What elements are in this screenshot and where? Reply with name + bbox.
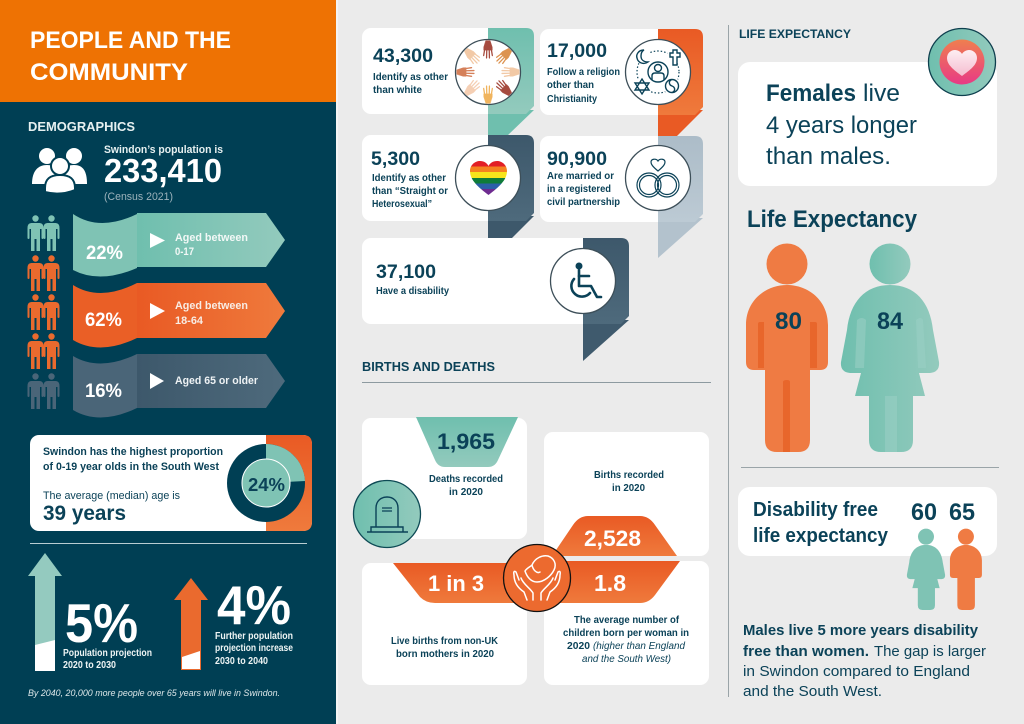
card: married or civil partnership: 90,900: [547, 149, 607, 170]
card: married or civil partnership: Are married or: [547, 171, 614, 182]
age band: 65 or older: 16%: [85, 381, 122, 402]
card: live births from non-UK mothers: born mothers in 2020: [396, 649, 494, 660]
callout: median age: 39 years: [43, 502, 126, 525]
tail: married: [658, 218, 703, 258]
callout: median age: Swindon has the highest proportion: [43, 446, 223, 458]
card: religion: 17,000: [547, 41, 607, 62]
card: disability: Have a disability: [376, 286, 449, 297]
age band: 65 or older: Aged 65 or older: [175, 375, 259, 387]
card: identify as other than white: [362, 28, 534, 114]
card: females live longer: than males.: [766, 143, 891, 170]
text: disability free explanation: [743, 623, 986, 700]
card: deaths: Deaths recorded: [429, 474, 503, 485]
figure: male 80: 80: [775, 308, 802, 335]
card: religion: other than: [547, 80, 594, 91]
tail: white other: [488, 110, 534, 136]
card: children per woman: [544, 561, 709, 685]
population figure: [104, 144, 223, 203]
callout: median age: of 0-19 year olds in the South West: [43, 461, 219, 473]
text: disability free explanation: free than women.: [743, 644, 869, 660]
heading: life expectancy chart: Life Expectancy: [747, 206, 918, 233]
card: disability free life expectancy: life expectancy: [753, 525, 889, 547]
figure: male 80: [746, 244, 828, 452]
heading: births and deaths: BIRTHS AND DEATHS: [362, 360, 495, 374]
card: religion: Follow a religion: [547, 67, 620, 78]
card: deaths: in 2020: [449, 487, 483, 498]
card: females live longer: live: [863, 80, 900, 107]
note: 2040 projection: By 2040, 20,000 more people over 65 years will live in Swindon.: [28, 688, 280, 699]
title banner: PEOPLE AND THE: [30, 27, 231, 54]
donut chart: 24%: [227, 444, 305, 522]
card: sexual orientation: Heterosexual”: [372, 199, 432, 210]
figure: small female 60: [907, 529, 945, 610]
age band: 0-17: [73, 213, 285, 277]
callout: median age: The average (median) age is: [43, 490, 180, 502]
card: identify as other than white: 43,300: [373, 46, 433, 67]
title banner: [0, 0, 336, 102]
stat: 4%: 4%: [217, 574, 291, 636]
icon: headstone: [354, 480, 420, 548]
card: live births from non-UK mothers: Live births from non-UK: [391, 636, 499, 647]
stat: 4%: [215, 574, 293, 667]
panel: left demographics sidebar: [0, 0, 336, 724]
age band: 0-17: 22%: [86, 243, 123, 264]
card: disability free life expectancy: Disability free: [753, 499, 878, 521]
card: religion: [540, 29, 703, 115]
age band: 18-64: 18-64: [175, 315, 204, 327]
icon: circle of hands: [456, 40, 520, 104]
card: births: [544, 432, 709, 556]
icon: heart badge: [928, 28, 996, 96]
card: identify as other than white: than white: [373, 85, 422, 96]
age band: 0-17: Aged between: [175, 232, 248, 244]
card: disability free life expectancy: 60: [911, 499, 937, 526]
donut chart: 24%: 24%: [248, 475, 285, 495]
card: children per woman: (higher than England: [593, 641, 685, 652]
tail: religion: [658, 110, 703, 136]
callout: median age: [30, 435, 312, 531]
stat: 5%: Population projection: [63, 648, 152, 659]
arrow: 5% projection: [28, 553, 62, 671]
banner: 2,528: 2,528: [584, 526, 641, 551]
card: births: in 2020: [612, 483, 645, 494]
card: disability free life expectancy: [738, 487, 997, 556]
figure: small male 65: [950, 529, 982, 610]
panel divider: [728, 25, 729, 697]
age band: 65 or older: [73, 354, 285, 418]
tail: disability: [583, 320, 629, 361]
icon: wedding rings: [626, 146, 690, 210]
icon: rainbow heart: [456, 146, 520, 210]
card: females live longer: 4 years longer: [766, 112, 917, 139]
icon: wheelchair: [550, 248, 616, 314]
stat: 5%: 2020 to 2030: [63, 660, 116, 671]
stat: 4%: Further population: [215, 631, 293, 642]
heading: demographics: DEMOGRAPHICS: [28, 119, 135, 134]
icon: baby in hands: [504, 544, 570, 612]
banner: 1 in 3: [393, 563, 535, 603]
banner: 1.8: [540, 561, 680, 603]
banner: 1 in 3: 1 in 3: [428, 571, 484, 596]
card: sexual orientation: than “Straight or: [372, 186, 448, 197]
card: sexual orientation: 5,300: [371, 149, 420, 170]
figure: female 84: 84: [877, 308, 904, 335]
card: sexual orientation: Identify as other: [372, 173, 446, 184]
age band: 18-64: 62%: [85, 310, 122, 331]
card: married or civil partnership: civil partnership: [547, 197, 620, 208]
card: births: Births recorded: [594, 470, 664, 481]
card: sexual orientation: [362, 135, 534, 221]
banner: 1.8: 1.8: [594, 570, 626, 596]
card: deaths: 1,965: [437, 429, 495, 454]
icon: group of people: [32, 148, 87, 194]
card: children per woman: 2020: [567, 641, 590, 652]
icon: religions: [626, 40, 690, 104]
card: females live longer: [738, 62, 997, 186]
stat: 4%: projection increase: [215, 643, 293, 654]
age band: 18-64: Aged between: [175, 300, 248, 312]
age band: 0-17: 0-17: [175, 246, 194, 258]
card: children per woman: The average number of: [574, 615, 680, 626]
card: married or civil partnership: [540, 136, 703, 222]
card: deaths: [362, 417, 527, 539]
population figure: (Census 2021): [104, 191, 173, 203]
stat: 5%: 5%: [65, 592, 138, 654]
text: disability free explanation: and the South West.: [743, 684, 882, 700]
text: disability free explanation: The gap is larger: [874, 644, 986, 660]
age band: 18-64: [73, 283, 285, 348]
card: identify as other than white: Identify as other: [373, 72, 448, 83]
card: children per woman: children born per woman in: [563, 628, 689, 639]
tail: orientation: [488, 216, 534, 238]
card: disability: [362, 238, 629, 324]
card: females live longer: Females: [766, 80, 856, 107]
banner: 2,528: [552, 516, 677, 556]
card: married or civil partnership: in a registered: [547, 184, 611, 195]
arrow: 4% projection: [174, 578, 208, 670]
title banner: COMMUNITY: [30, 59, 188, 86]
population figure: 233,410: [104, 152, 222, 189]
text: disability free explanation: in Swindon compared to England: [743, 664, 970, 680]
population figure: Swindon’s population is: [104, 144, 223, 156]
card: disability free life expectancy: 65: [949, 499, 975, 526]
stat: 4%: 2030 to 2040: [215, 656, 268, 667]
card: live births from non-UK mothers: [362, 563, 527, 685]
card: disability: 37,100: [376, 262, 436, 283]
card: children per woman: and the South West): [582, 654, 671, 665]
text: disability free explanation: Males live 5 more years disability: [743, 623, 978, 639]
icon: people pictogram column: [28, 215, 60, 409]
figure: female 84: [841, 244, 939, 452]
card: religion: Christianity: [547, 94, 597, 105]
heading: life expectancy: LIFE EXPECTANCY: [739, 27, 851, 41]
